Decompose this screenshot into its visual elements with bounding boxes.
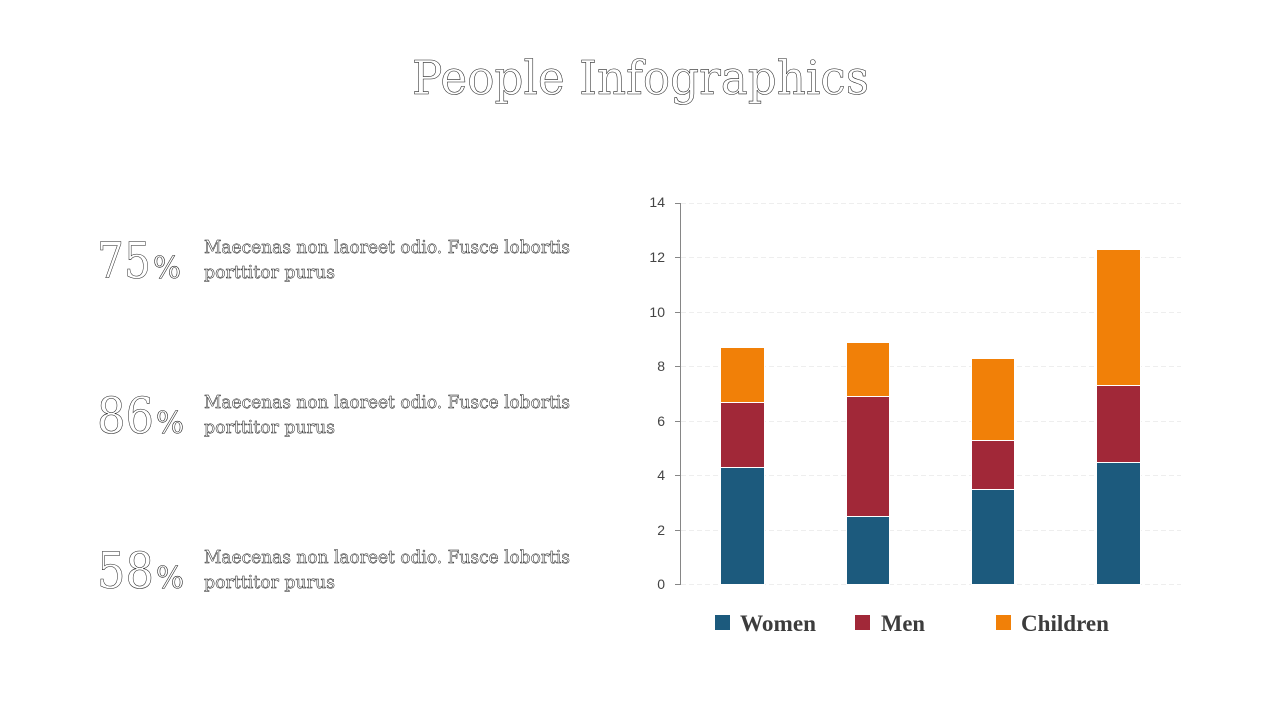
- stat value: 58%: %: [156, 561, 184, 596]
- y axis labels: 6: [657, 413, 665, 429]
- y axis labels: 2: [657, 522, 665, 538]
- title: People Infographics: [412, 51, 869, 106]
- stat description: 58%: porttitor purus: [204, 572, 335, 593]
- stat value: 75%: 75: [97, 232, 151, 290]
- stat description: 86%: porttitor purus: [204, 417, 335, 438]
- bar group 2: [846, 342, 890, 584]
- y axis labels: 14: [649, 194, 665, 210]
- legend: [715, 611, 1109, 636]
- stat row: 75%: [97, 232, 570, 290]
- legend item: Children: Children: [1021, 611, 1109, 636]
- stat row: 58%: [97, 542, 570, 600]
- stat description: 75%: porttitor purus: [204, 262, 335, 283]
- bar group 1: [720, 348, 764, 584]
- stat value: 86%: %: [156, 406, 184, 441]
- stacked bar chart: [649, 194, 1181, 592]
- y axis labels: 12: [649, 249, 665, 265]
- stat value: 58%: 58: [97, 542, 154, 600]
- y axis labels: 0: [657, 576, 665, 592]
- stat description: 86%: Maecenas non laoreet odio. Fusce lobortis: [204, 392, 570, 413]
- legend item: Women: Women: [740, 611, 816, 636]
- y axis labels: 4: [657, 467, 665, 483]
- stat value: 75%: %: [153, 251, 181, 286]
- stat description: 58%: Maecenas non laoreet odio. Fusce lobortis: [204, 547, 570, 568]
- y axis labels: 8: [657, 358, 665, 374]
- stat description: 75%: Maecenas non laoreet odio. Fusce lobortis: [204, 237, 570, 258]
- legend item: Men: [855, 611, 925, 636]
- y axis labels: [649, 194, 665, 592]
- stat row: 86%: [97, 387, 570, 445]
- bar group 4: [1096, 250, 1140, 584]
- bar group 3: [972, 358, 1014, 584]
- y axis labels: 10: [649, 304, 665, 320]
- legend item: Men: Men: [881, 611, 925, 636]
- stat value: 86%: 86: [97, 387, 154, 445]
